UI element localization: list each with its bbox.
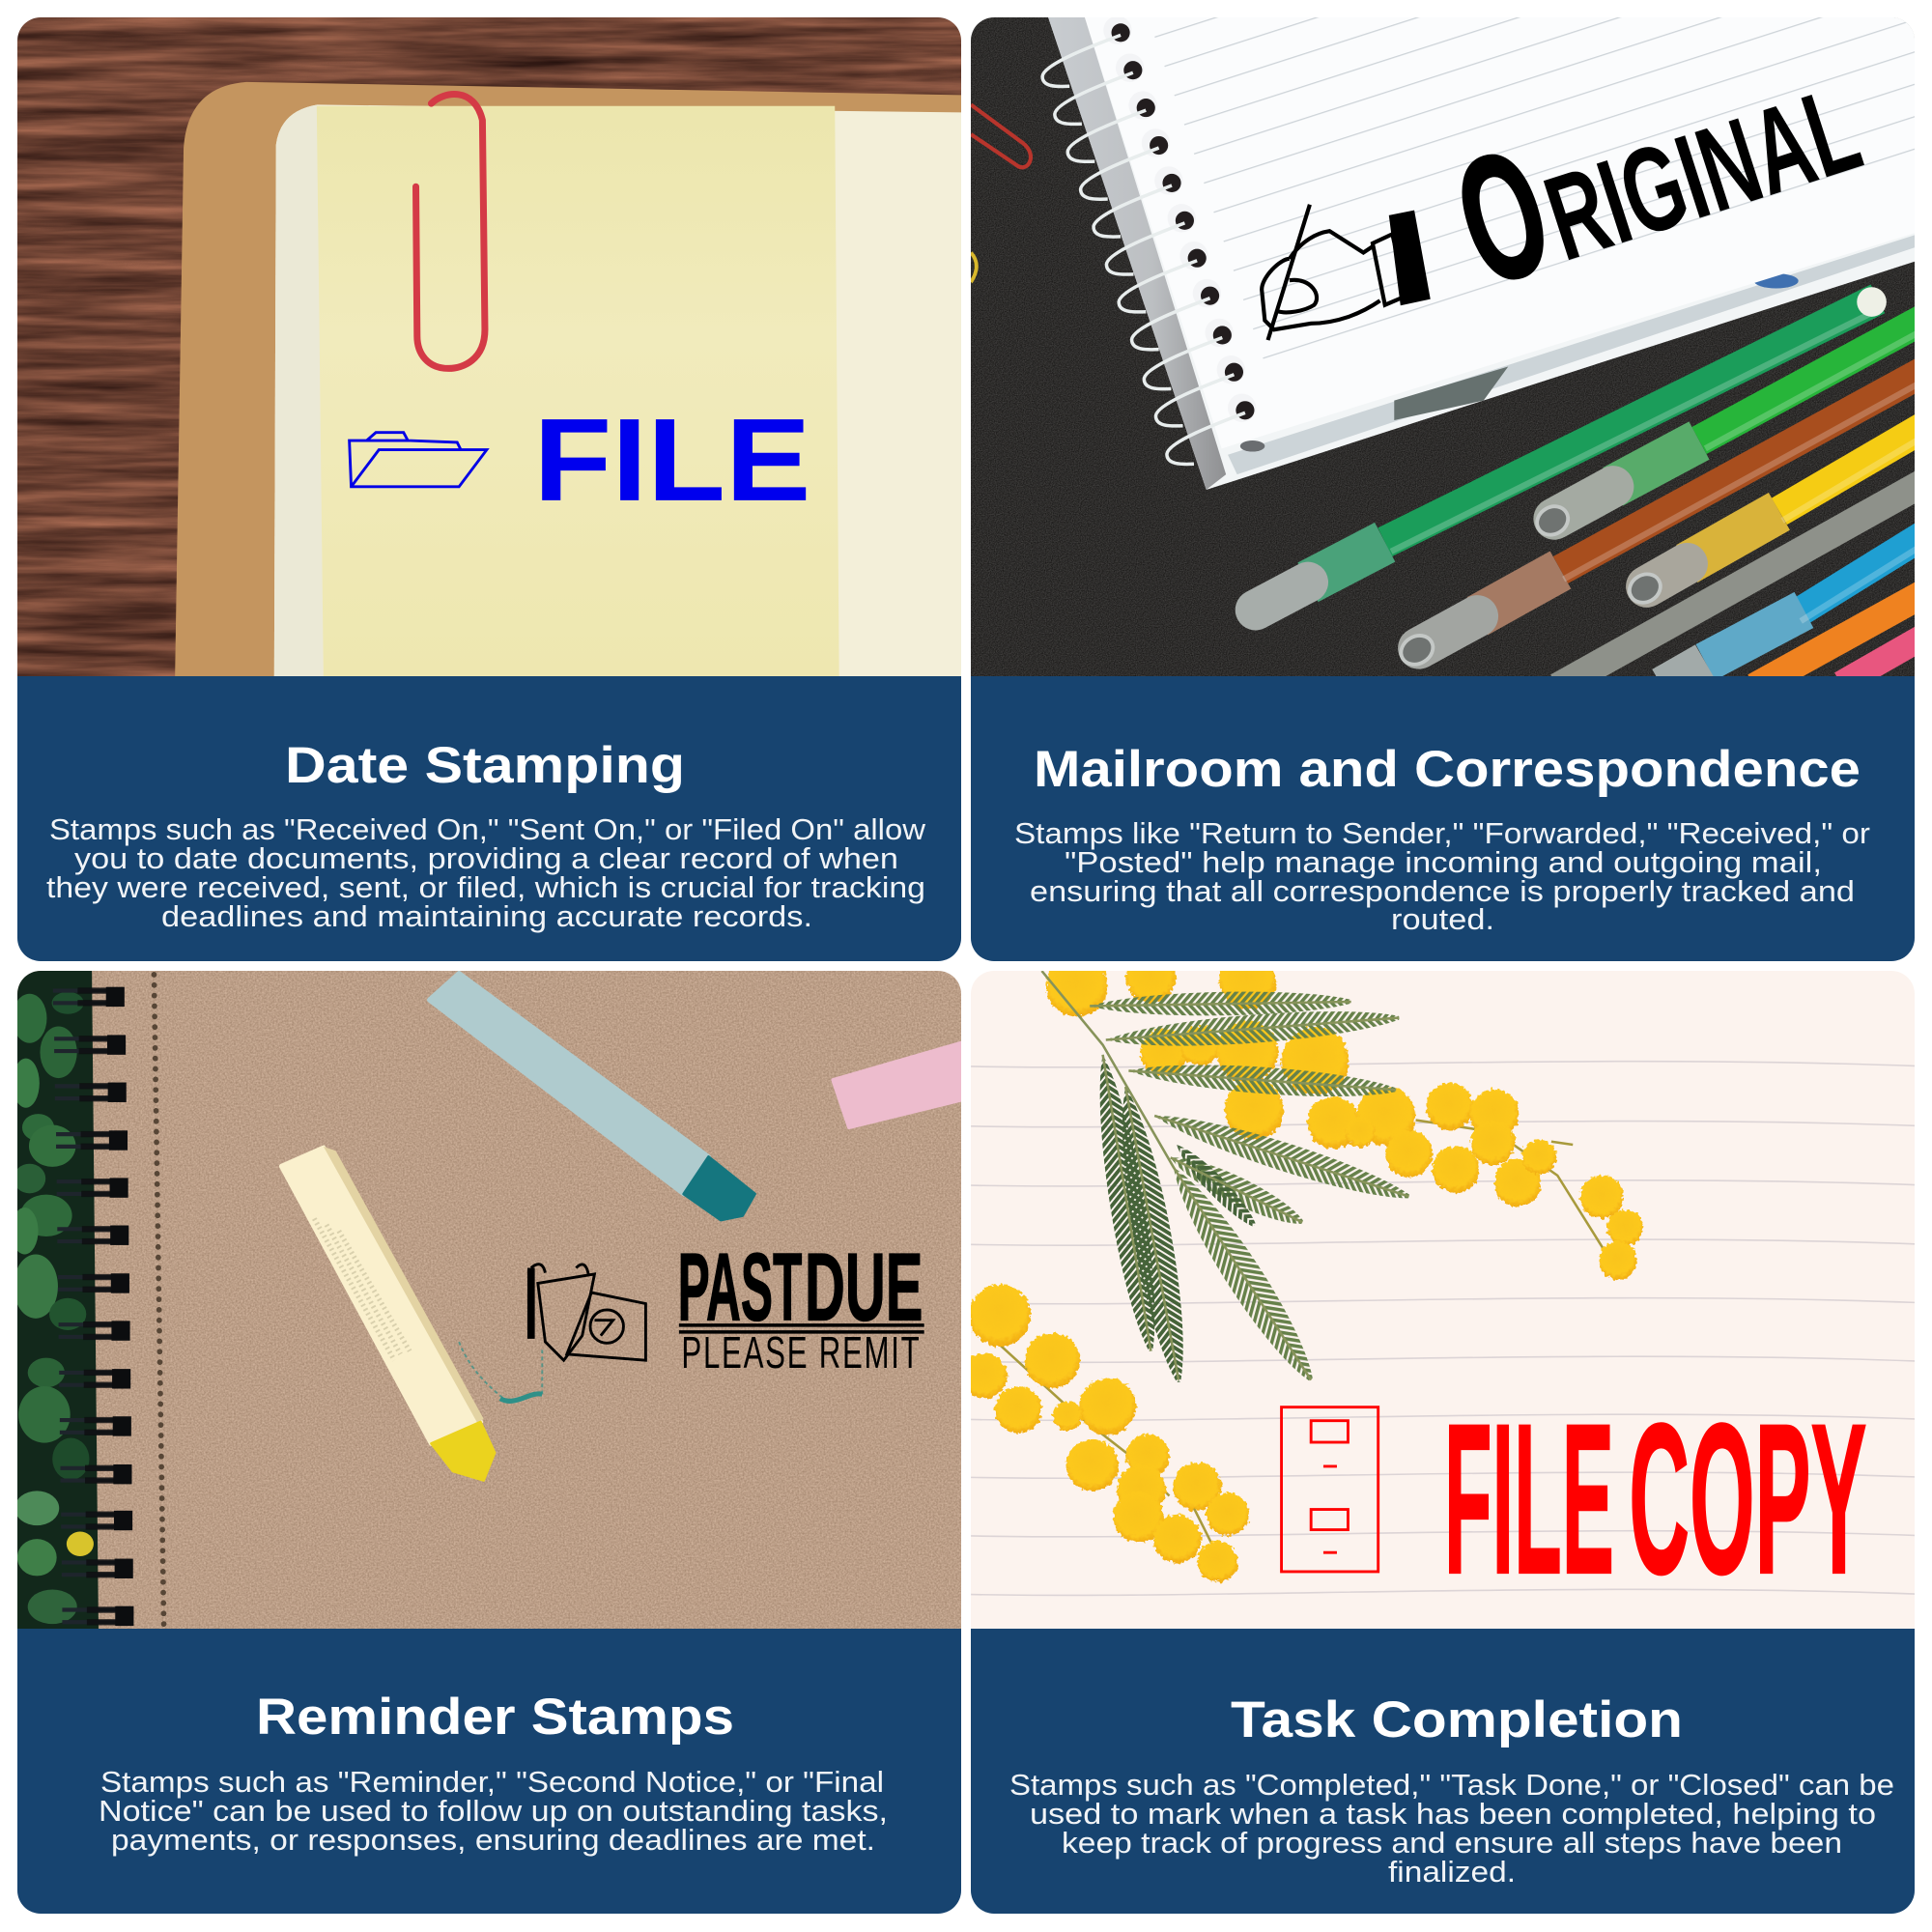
photo: notebook and coloured pens with ORIGINAL stamp bbox=[966, 0, 1932, 687]
grey pen bbox=[1557, 480, 1927, 687]
body text: "Posted" help manage incoming and outgoing mail, bbox=[1065, 845, 1822, 879]
body text bbox=[1014, 816, 1870, 936]
stamp words FILE COPY: FILE bbox=[1444, 1379, 1614, 1619]
red paper clip bbox=[416, 95, 485, 368]
body text: finalized. bbox=[1388, 1855, 1516, 1889]
body text: routed. bbox=[1391, 902, 1494, 936]
body text: ensuring that all correspondence is properly tracked and bbox=[1030, 874, 1855, 908]
yellow sticky note bbox=[317, 106, 839, 678]
frond stems bbox=[1041, 971, 1409, 1380]
cream chalk striations bbox=[314, 1218, 410, 1360]
cream chalk yellow tip bbox=[431, 1422, 495, 1481]
icon: red filing cabinet stamp bbox=[1282, 1407, 1378, 1572]
caption band bbox=[17, 676, 961, 961]
paper background bbox=[966, 966, 1932, 1637]
left paper edge bbox=[274, 104, 317, 676]
notebook lower white layer bbox=[1042, 0, 1927, 490]
caption band bbox=[971, 676, 1915, 961]
stamp text: PAST DUE: DUE bbox=[805, 1235, 923, 1342]
stamp text: PLEASE REMIT: PLEASE REMIT bbox=[681, 1328, 920, 1378]
ruled lines bbox=[971, 1062, 1927, 1595]
pink pen bbox=[1841, 635, 1927, 684]
small lower punch hole bbox=[1240, 440, 1264, 452]
body text: you to date documents, providing a clear record of when bbox=[74, 841, 898, 875]
body text: Stamps like "Return to Sender," "Forwarded," "Received," or bbox=[1014, 816, 1870, 850]
ruled area bbox=[1142, 0, 1927, 373]
frond: long right bbox=[1158, 1158, 1326, 1390]
heading: reminder stamps: Reminder Stamps bbox=[256, 1689, 734, 1746]
blue chalk teal tip bbox=[684, 1157, 754, 1220]
notebook page bbox=[1079, 0, 1927, 448]
frond: sixth bbox=[1170, 1138, 1262, 1232]
photo: kraft notebook with chalk and PAST DUE stamp bbox=[0, 966, 985, 1637]
heading: mailroom: Mailroom and Correspondence bbox=[1034, 741, 1861, 798]
stamp word ORIGINAL bbox=[1435, 12, 1878, 323]
cream paper bbox=[274, 104, 985, 678]
body text: payments, or responses, ensuring deadlines are met. bbox=[111, 1823, 875, 1857]
tan folder bbox=[175, 82, 985, 678]
pink chalk bbox=[833, 1041, 967, 1127]
frond: third bbox=[1127, 1058, 1397, 1103]
caption band bbox=[17, 1629, 961, 1914]
blue chalk bbox=[430, 974, 708, 1194]
body text: deadlines and maintaining accurate records. bbox=[161, 899, 812, 933]
stamp word FILE: FILE bbox=[533, 394, 810, 526]
frond: fifth bbox=[1165, 1146, 1308, 1234]
printed mark on notebook edge bbox=[1394, 366, 1508, 420]
icon: calendar and clock stamp bbox=[531, 1264, 645, 1360]
body text bbox=[99, 1765, 888, 1857]
mimosa stems bbox=[1000, 1120, 1604, 1546]
notebook silver layer bbox=[1228, 231, 1927, 474]
cream chalk bbox=[281, 1148, 480, 1443]
heading: date stamping: Date Stamping bbox=[285, 737, 685, 794]
blue pen bbox=[1798, 533, 1927, 613]
perforation dots bbox=[154, 975, 164, 1629]
pen highlights bbox=[1391, 307, 1927, 621]
notebook binding strip bbox=[1042, 0, 1226, 490]
icon: blue folder stamp bbox=[350, 433, 487, 487]
frond: long middle bbox=[1107, 1084, 1197, 1385]
body text: Stamps such as "Received On," "Sent On," or "Filed On" allow bbox=[49, 812, 926, 846]
yellow pen bbox=[1779, 425, 1927, 511]
body text bbox=[46, 812, 926, 933]
photo: mimosa on ruled paper with FILE COPY stamp bbox=[962, 952, 1932, 1637]
orange pen bbox=[1754, 591, 1927, 687]
panel: date stamping bbox=[0, 0, 985, 961]
body text: used to mark when a task has been completed, helping to bbox=[1030, 1797, 1876, 1831]
white pen end bbox=[1857, 287, 1887, 317]
cream chalk side bbox=[324, 1147, 484, 1423]
panel: reminder stamps bbox=[0, 966, 985, 1914]
yellow clip bbox=[971, 252, 977, 282]
pens bbox=[1256, 298, 1927, 687]
frond: top bbox=[1090, 990, 1351, 1018]
frond: fourth bbox=[1151, 1102, 1413, 1209]
body text: keep track of progress and ensure all steps have been bbox=[1062, 1826, 1842, 1860]
wood table background bbox=[0, 0, 985, 678]
panel: task completion bbox=[962, 952, 1932, 1914]
spiral rings bbox=[1042, 16, 1256, 464]
stamp text: PAST DUE: PAST bbox=[678, 1235, 802, 1342]
photo: paper clip on note with FILE stamp bbox=[0, 0, 985, 678]
frond: long left bbox=[1086, 1052, 1167, 1353]
stamp rule bbox=[679, 1325, 924, 1332]
icon: hand writing stamp bbox=[1262, 205, 1428, 340]
body text: Stamps such as "Reminder," "Second Notice," or "Final bbox=[100, 1765, 884, 1799]
green foliage strip bbox=[0, 966, 99, 1637]
mimosa fronds bbox=[1086, 990, 1413, 1390]
body text: they were received, sent, or filed, which is crucial for tracking bbox=[46, 870, 925, 904]
mimosa flower clusters bbox=[962, 952, 1643, 1582]
brown pen bbox=[1560, 370, 1927, 570]
heading: task completion: Task Completion bbox=[1231, 1691, 1683, 1748]
body text bbox=[1009, 1768, 1894, 1889]
blue mark on notebook edge bbox=[1754, 273, 1799, 288]
dark green pen bbox=[1385, 298, 1878, 542]
kraft cardboard background bbox=[0, 966, 985, 1637]
caption band bbox=[971, 1629, 1915, 1914]
dark desk background bbox=[966, 0, 1932, 678]
body text: Stamps such as "Completed," "Task Done," or "Closed" can be bbox=[1009, 1768, 1894, 1802]
frond: second bbox=[1105, 1004, 1400, 1054]
teal chalk scribble bbox=[459, 1342, 542, 1401]
body text: Notice" can be used to follow up on outstanding tasks, bbox=[99, 1794, 888, 1828]
bright green pen bbox=[1699, 317, 1927, 440]
panel: mailroom and correspondence bbox=[966, 0, 1932, 961]
pen cap openings bbox=[1396, 500, 1665, 670]
spiral coil binding bbox=[53, 987, 133, 1626]
red paper clip bbox=[971, 104, 1031, 167]
stamp word ORIGINAL: O bbox=[1435, 110, 1571, 323]
